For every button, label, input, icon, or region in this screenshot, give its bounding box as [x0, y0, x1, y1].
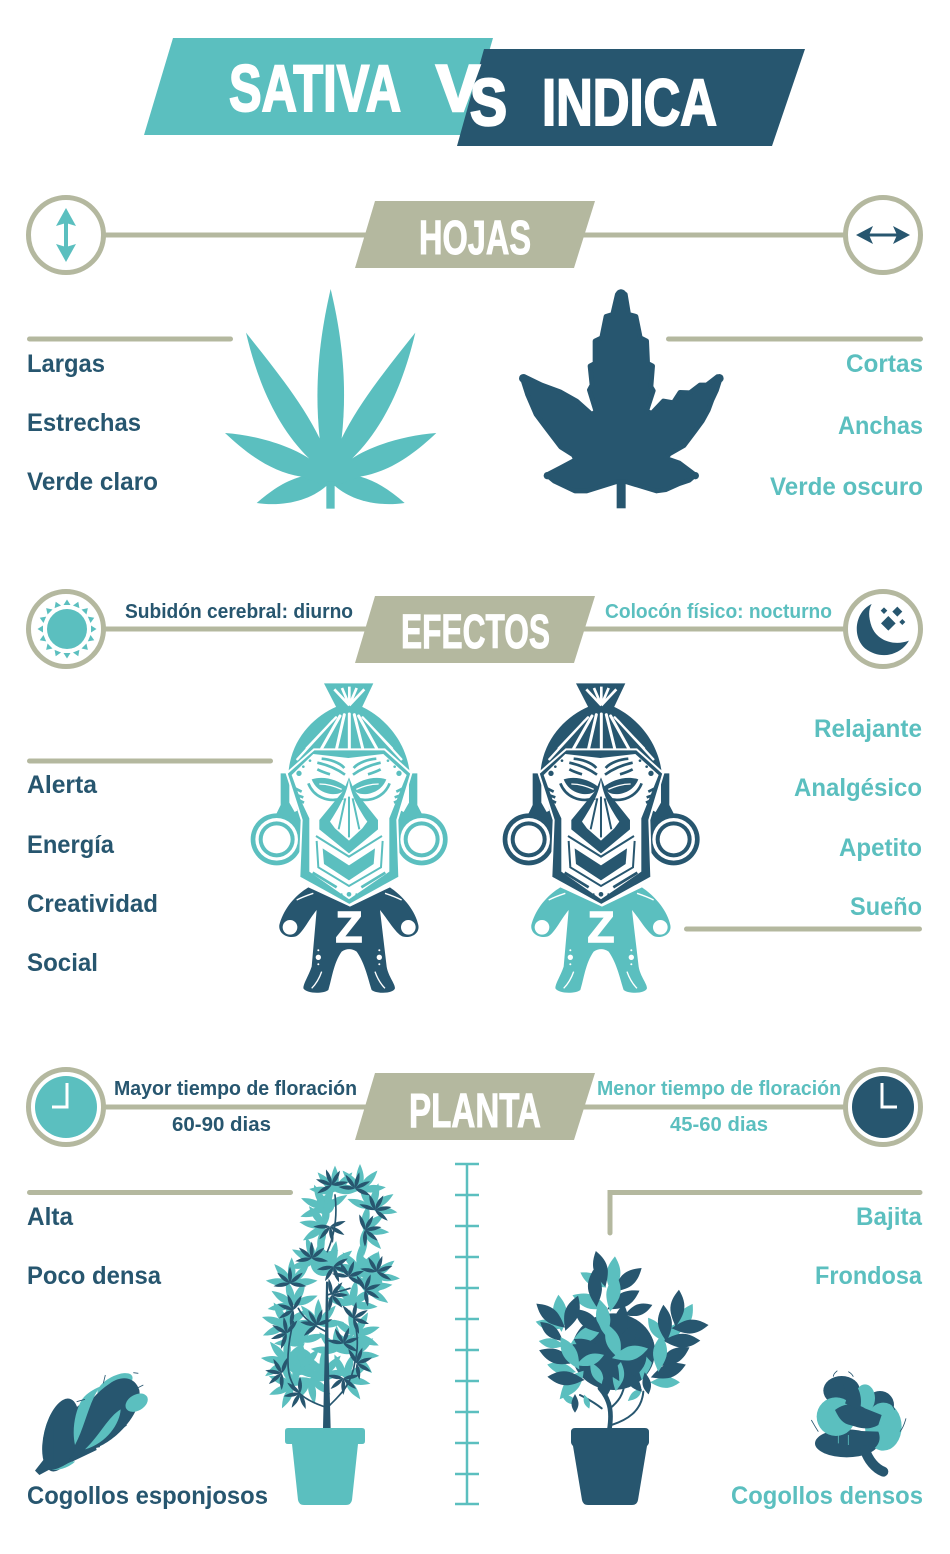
icon: sativa bud [35, 1368, 151, 1475]
text: sueno: Sueño [850, 893, 922, 921]
text: cogollos esponjosos: Cogollos esponjosos [27, 1482, 268, 1510]
banner: indica [457, 49, 805, 146]
text: frondosa: Frondosa [815, 1262, 923, 1290]
banner: sativa [144, 38, 493, 135]
text: creatividad: Creatividad [27, 890, 158, 918]
connector line [104, 232, 845, 238]
icon: sativa plant [250, 1164, 404, 1505]
heading: planta [355, 1073, 595, 1140]
panel: efectos sativa list [27, 758, 273, 977]
heading: efectos [355, 596, 595, 663]
pot [571, 1428, 649, 1505]
heading: planta: PLANTA [409, 1085, 541, 1138]
icon: indica leaf [519, 289, 724, 508]
icon: horizontal arrow [846, 198, 920, 272]
icon: vertical arrow [28, 198, 104, 272]
panel: planta sativa list [27, 1190, 293, 1510]
title: vs: V [436, 51, 480, 125]
text: 60-90 dias: 60-90 dias [172, 1114, 271, 1136]
text: poco densa: Poco densa [27, 1262, 162, 1290]
icon: indica bud [811, 1371, 906, 1472]
section: planta header [28, 1070, 920, 1144]
panel: hojas sativa list [27, 336, 233, 496]
title: sativa: SATIVA [229, 51, 401, 125]
connector line [104, 626, 845, 632]
text: alerta: Alerta [27, 771, 98, 799]
text: z: Z [336, 903, 362, 952]
panel: efectos indica list [684, 715, 922, 932]
text: mayor tiempo: Mayor tiempo de floración [114, 1078, 357, 1100]
text: social: Social [27, 949, 98, 977]
text: cogollos densos: Cogollos densos [731, 1482, 923, 1510]
panel: hojas indica list [666, 336, 923, 501]
heading: efectos: EFECTOS [401, 606, 550, 659]
icon: sativa leaf [225, 289, 436, 509]
text: relajante: Relajante [814, 715, 922, 743]
text: bajita: Bajita [856, 1203, 923, 1231]
text: analgesico: Analgésico [794, 774, 922, 802]
connector line [104, 1104, 845, 1110]
section: hojas header [28, 198, 920, 272]
title banner [144, 38, 805, 146]
section: efectos header [28, 592, 920, 666]
text: colocon: Colocón físico: nocturno [605, 601, 832, 623]
ruler [455, 1164, 479, 1504]
text: z: Z [588, 903, 614, 952]
heading: hojas: HOJAS [419, 212, 531, 265]
icon: sun [28, 592, 104, 666]
heading: hojas [355, 201, 595, 268]
text: estrechas: Estrechas [27, 409, 141, 437]
text: alta: Alta [27, 1203, 74, 1231]
text: menor tiempo: Menor tiempo de floración [597, 1078, 841, 1100]
text: verde oscuro: Verde oscuro [770, 473, 923, 501]
icon: sativa tiki figure [251, 683, 448, 993]
icon: indica plant [532, 1249, 709, 1505]
panel: planta indica list [610, 1192, 923, 1510]
icon: clock sativa [28, 1070, 104, 1144]
icon: indica tiki figure [503, 683, 700, 993]
text: apetito: Apetito [839, 834, 922, 862]
title: indica: INDICA [542, 65, 717, 139]
pot [285, 1428, 365, 1505]
icon: clock indica [846, 1070, 920, 1144]
text: energia: Energía [27, 831, 115, 859]
text: 45-60 dias: 45-60 dias [670, 1114, 768, 1136]
icon: moon [846, 592, 920, 666]
text: subidon: Subidón cerebral: diurno [125, 601, 353, 623]
title: vs second letter: S [470, 65, 507, 139]
text: anchas: Anchas [838, 412, 923, 440]
text: cortas: Cortas [846, 350, 923, 378]
text: largas: Largas [27, 350, 105, 378]
text: verde claro: Verde claro [27, 468, 158, 496]
